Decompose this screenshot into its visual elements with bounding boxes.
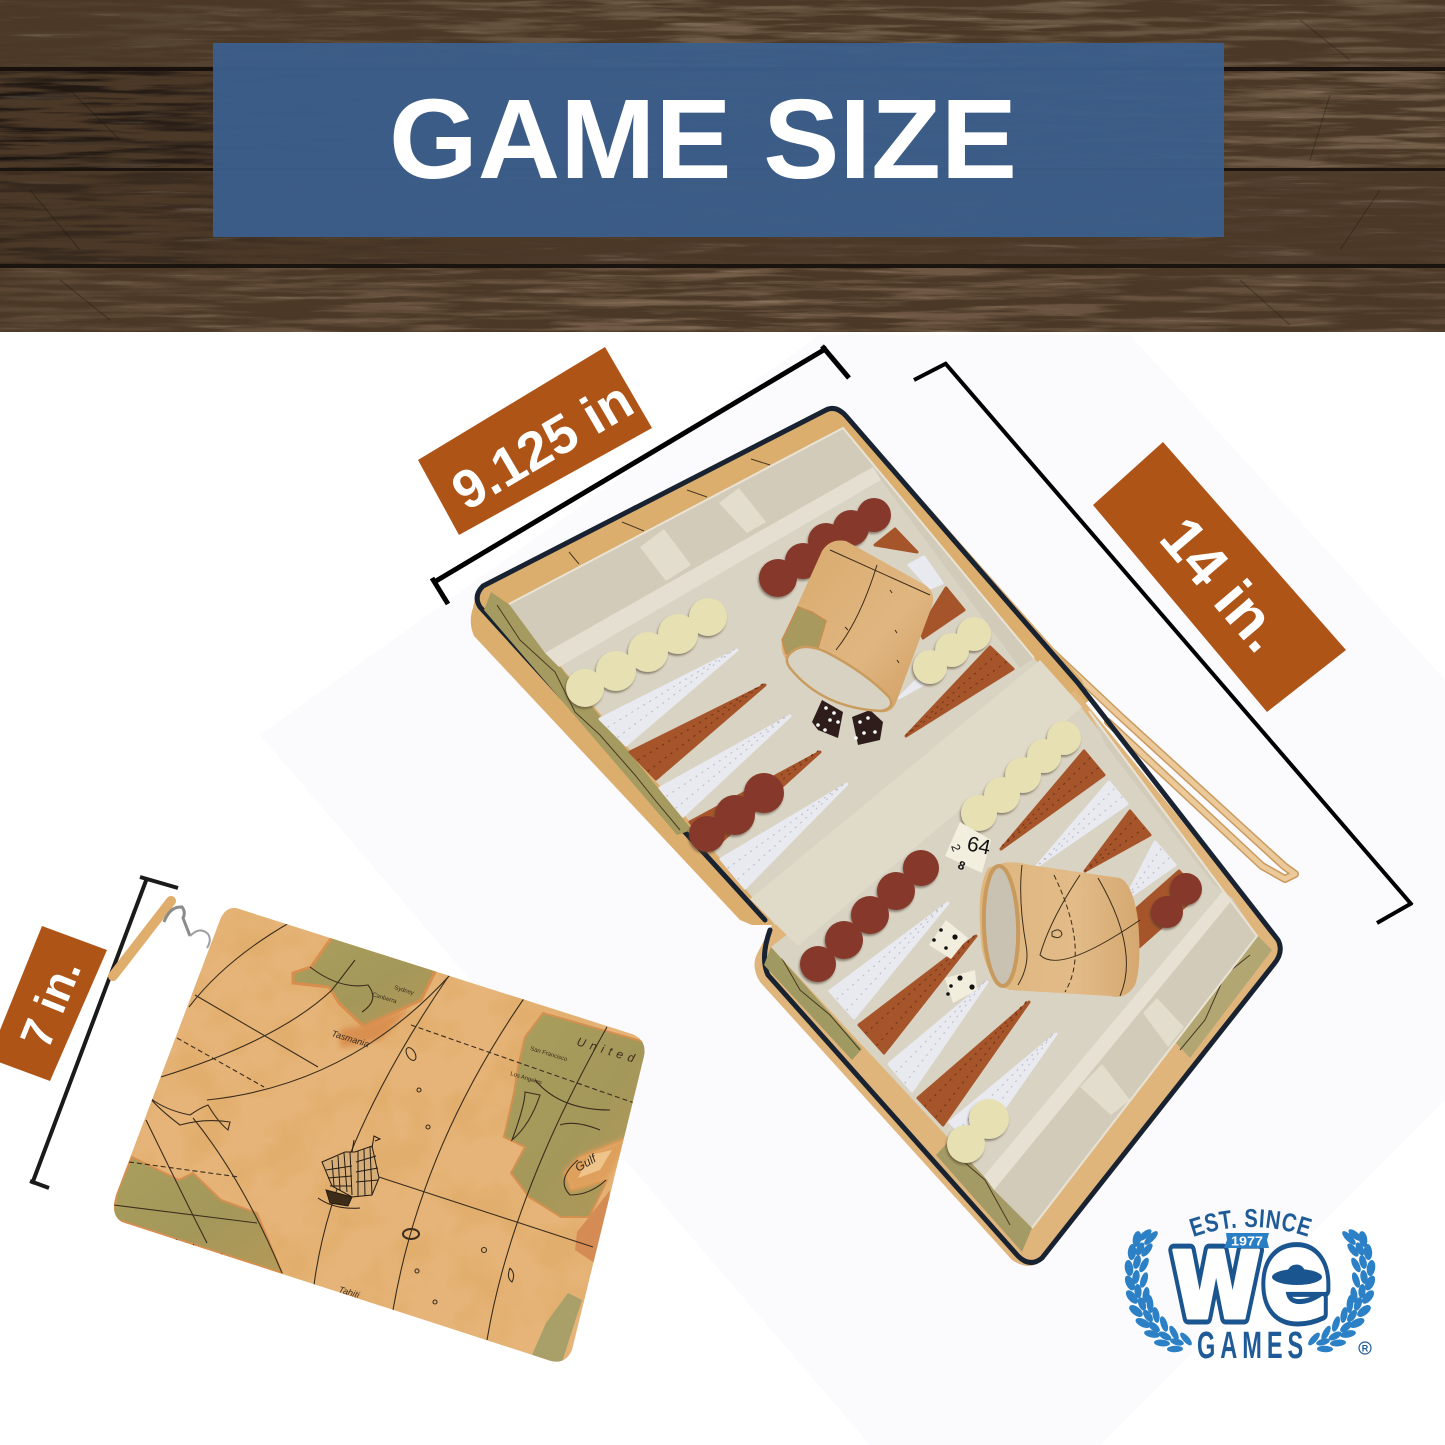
brown points: [630, 529, 1200, 1125]
icon: sailing ship: [318, 1136, 380, 1208]
map lettering: Australia: [343, 932, 432, 970]
dimension line: 9.125 in: [432, 346, 849, 604]
zipper: [477, 408, 1280, 1263]
logo: EST. SINCE: EST. SINCE: [1189, 1208, 1312, 1237]
map: South America: [532, 1293, 582, 1365]
map lettering: Gulf: [572, 1151, 600, 1175]
olive map band: upper left: [484, 592, 692, 835]
wood plank header: [0, 0, 1445, 332]
logo: WE mark: we: [1170, 1204, 1330, 1348]
case body: [114, 908, 644, 1362]
clip and strap of closed case: [113, 901, 210, 976]
map lettering: San Francisco: [529, 1046, 568, 1063]
map: North America: [504, 1013, 648, 1217]
logo: registered mark: [1359, 1342, 1371, 1354]
map lettering: United: [575, 1034, 641, 1067]
tray walls and compartments: [509, 428, 1257, 1228]
ivory dice: [929, 920, 977, 1003]
compartment bar: upper: [545, 467, 881, 667]
logo: laurel left: [1123, 1227, 1194, 1352]
We Games logo: [1124, 1204, 1376, 1366]
doubling die: 64: [965, 832, 993, 860]
label: 7 in: 7 in.: [10, 952, 91, 1054]
map lettering: Sydney: [393, 985, 414, 997]
wrist strap of open board: [1052, 652, 1295, 879]
felt tray: lower half: [771, 706, 1257, 1228]
map lettering: [176, 986, 636, 1298]
label: 9.125 in: [418, 347, 652, 535]
compartment bar: lower: [984, 891, 1232, 1190]
logo: registered mark: R: [1362, 1344, 1369, 1354]
felt tray: upper half: [509, 428, 1072, 925]
map lettering: Tasmania: [330, 1028, 370, 1049]
map lettering: Canberra: [371, 992, 398, 1005]
brown checkers: [689, 498, 1202, 982]
doubling die: 8: [956, 858, 968, 873]
map lettering: Atlant: [168, 1236, 228, 1265]
map: Australia: [293, 937, 436, 1027]
map lettering: Los Angeles: [509, 1071, 542, 1086]
white point perforations: [608, 649, 1169, 1142]
board shell: lower half: [754, 690, 1281, 1266]
white points: [600, 557, 1175, 1150]
compartment dividers: lower: [1080, 998, 1184, 1115]
closed map case: [114, 908, 644, 1362]
doubling die: [945, 822, 993, 873]
dice cup: upper: [782, 540, 933, 712]
cream checkers: [566, 598, 1081, 1163]
compartment rims: [509, 428, 1257, 1228]
logo: GAMES: GAMES: [1197, 1323, 1308, 1366]
dark dice: [812, 700, 883, 745]
center spine: [750, 660, 1082, 946]
compartment dividers: upper: [640, 488, 766, 581]
doubling die: 2: [948, 842, 964, 854]
label: 14 in: 14 in.: [1147, 504, 1298, 664]
map: Central America: [575, 1190, 610, 1270]
logo: 1977 ribbon: [1224, 1233, 1269, 1248]
open backgammon board: [471, 407, 1281, 1266]
map: Gulf: [564, 1135, 632, 1192]
label: 14 in: [1093, 442, 1346, 712]
map lines: [114, 923, 640, 1340]
dimension line: 14 in: [914, 363, 1412, 923]
dice cup: lower: [980, 862, 1140, 997]
logo: 1977 ribbon: 1977: [1231, 1234, 1263, 1248]
logo: laurel right: [1306, 1227, 1377, 1352]
olive map band: lower right corner: [1176, 936, 1272, 1058]
brown point stitching: [638, 654, 1144, 1117]
label: 9.125 in: 9.125 in: [442, 370, 643, 522]
logo: WE mark: we: [1170, 1204, 1330, 1348]
title banner: [213, 43, 1224, 237]
dimension line: 7 in: [30, 877, 178, 1188]
olive map band: lower left: [764, 947, 862, 1060]
board shell: upper half: [471, 407, 1090, 925]
map lines on borders: [497, 459, 1250, 1225]
title: GAME SIZE: GAME SIZE: [389, 76, 1017, 202]
label: 7 in: [0, 926, 107, 1081]
map: lower left landmass: [112, 1157, 282, 1273]
map lettering: Tahiti: [337, 1284, 362, 1300]
